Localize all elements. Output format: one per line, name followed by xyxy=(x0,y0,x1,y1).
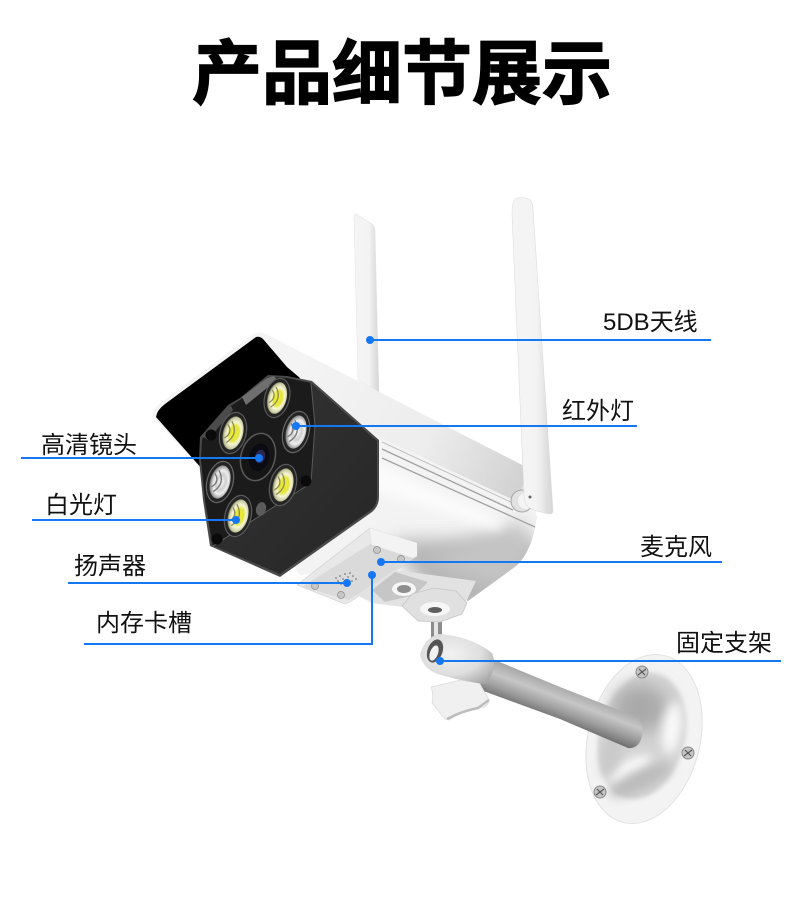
label: speaker: 扬声器 xyxy=(74,553,146,580)
hole xyxy=(300,476,312,486)
thumb screw xyxy=(431,678,489,720)
camera body xyxy=(294,422,537,601)
line: white light xyxy=(32,519,236,521)
bracket arm xyxy=(478,658,643,748)
line: speaker xyxy=(68,582,347,584)
label: bracket: 固定支架 xyxy=(676,630,772,657)
line: antenna xyxy=(370,339,711,341)
label: antenna: 5DB天线 xyxy=(603,309,698,336)
label: microphone: 麦克风 xyxy=(640,534,712,561)
speaker holes xyxy=(335,572,357,585)
line: lens xyxy=(21,457,259,459)
label: infrared: 红外灯 xyxy=(562,398,634,425)
LED yellow xyxy=(220,492,256,540)
bracket wall plate xyxy=(585,654,703,824)
line: microphone xyxy=(381,561,722,563)
ball joint xyxy=(420,634,494,684)
LED infrared xyxy=(278,408,314,456)
screw xyxy=(594,786,606,798)
swivel pin xyxy=(431,608,442,642)
title: 产品细节展示 xyxy=(192,35,612,113)
hole xyxy=(206,430,216,440)
sensor xyxy=(254,501,268,517)
left antenna xyxy=(354,214,379,392)
LED yellow xyxy=(265,461,301,509)
line: infrared xyxy=(296,425,637,427)
callout dots xyxy=(232,336,444,665)
callout lines xyxy=(21,340,781,661)
antenna hinge xyxy=(511,490,534,512)
body seam lines xyxy=(382,442,535,527)
bracket base xyxy=(357,570,476,622)
camera black face xyxy=(199,375,379,577)
LED infrared xyxy=(202,458,238,506)
lens xyxy=(235,429,281,485)
right antenna xyxy=(511,198,553,514)
LED yellow xyxy=(260,376,294,420)
line: memory card xyxy=(84,575,372,644)
screw xyxy=(636,666,648,678)
mounting plate xyxy=(297,528,417,604)
LED yellow xyxy=(215,409,251,457)
label: white light: 白光灯 xyxy=(45,492,117,519)
camera illustration xyxy=(21,197,781,824)
label: memory card: 内存卡槽 xyxy=(96,610,192,637)
hole xyxy=(212,534,222,544)
hood xyxy=(152,333,526,503)
line: bracket xyxy=(440,660,781,662)
label: lens: 高清镜头 xyxy=(41,432,137,459)
screw xyxy=(682,747,694,759)
